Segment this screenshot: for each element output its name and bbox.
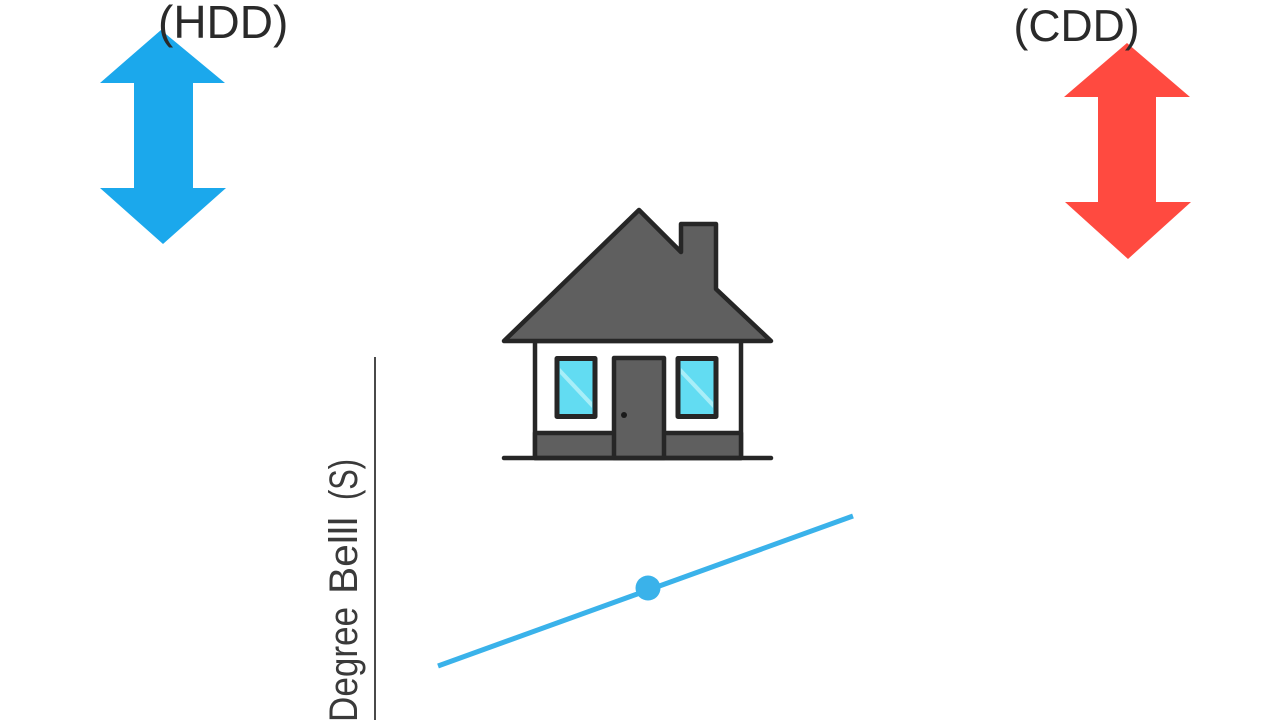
data point xyxy=(636,576,660,600)
house wall xyxy=(535,341,741,458)
y axis label: Degree xyxy=(322,607,366,720)
icon: house xyxy=(504,210,771,458)
left window xyxy=(557,358,595,416)
chart: degree line chart xyxy=(322,357,853,720)
heading: CDD label: (CDD) xyxy=(1014,2,1140,51)
house roof and chimney xyxy=(504,210,771,341)
door xyxy=(614,358,664,458)
icon: blue double arrow (HDD) xyxy=(100,30,226,244)
y axis label: Belll xyxy=(322,517,366,594)
trend line xyxy=(438,516,853,666)
door knob xyxy=(621,412,627,418)
icon: red double arrow (CDD) xyxy=(1064,43,1191,259)
right window xyxy=(678,358,716,416)
y axis label xyxy=(322,459,366,720)
y axis label: (S) xyxy=(322,459,366,500)
y axis xyxy=(374,357,376,720)
house foundation xyxy=(535,433,741,458)
ground line xyxy=(504,456,771,460)
